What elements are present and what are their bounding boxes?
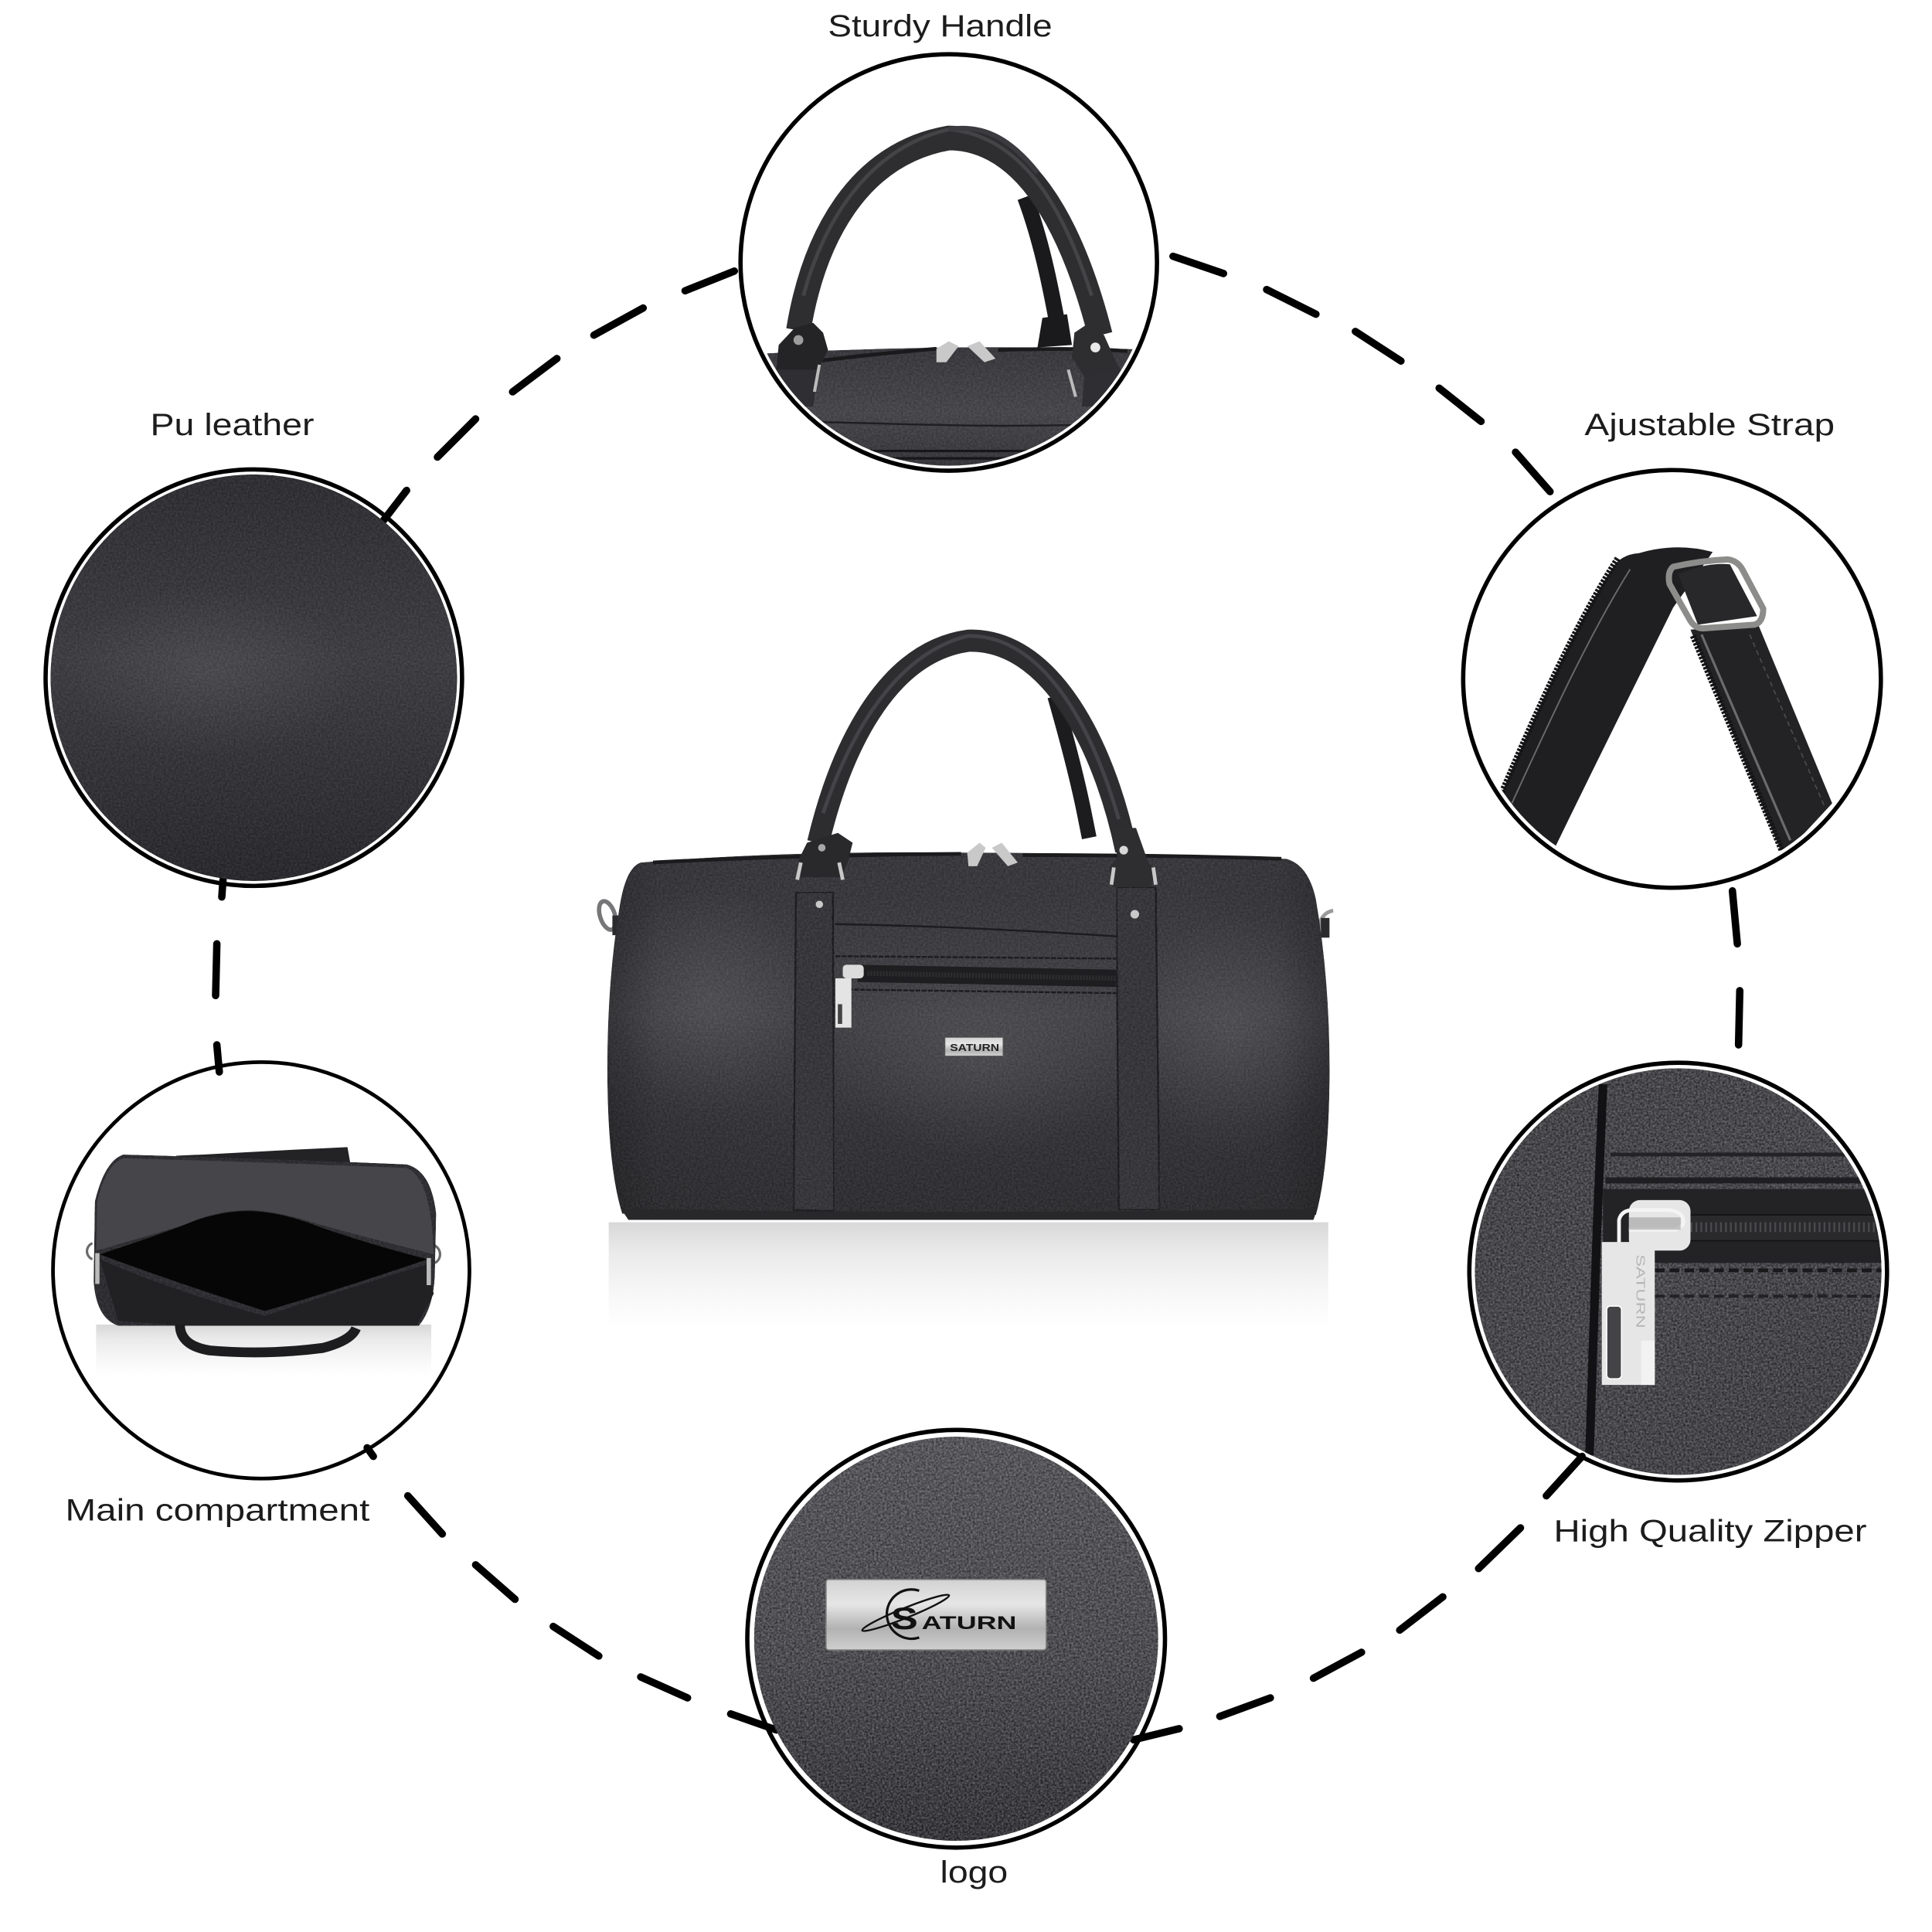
panel: logo xyxy=(747,1430,1165,1848)
leather swatch xyxy=(50,474,457,881)
top zipper seam xyxy=(653,854,1281,862)
label: pu leather: Pu leather xyxy=(151,408,315,442)
pocket zipper pull xyxy=(835,964,864,1028)
circle outline xyxy=(740,54,1157,471)
circle outline xyxy=(46,469,462,886)
bottom handle xyxy=(180,1325,356,1352)
top zipper pulls xyxy=(968,843,1018,866)
panel: sturdy handle xyxy=(740,54,1158,493)
top panel highlight xyxy=(96,1158,434,1254)
bag reflection xyxy=(96,1325,431,1376)
lower panel xyxy=(100,1259,434,1326)
front handle xyxy=(818,636,1126,850)
panel: pu leather xyxy=(46,469,462,886)
zipper image xyxy=(1466,1060,1891,1485)
right strap xyxy=(1109,828,1159,1210)
swatch highlight xyxy=(62,585,357,758)
outer shell xyxy=(94,1155,436,1326)
circle outline xyxy=(1463,470,1881,888)
floor reflection xyxy=(609,1223,1328,1328)
zipper image: SATURN xyxy=(1633,1254,1646,1328)
circle outline xyxy=(747,1430,1165,1848)
circle outline xyxy=(53,1062,469,1478)
circle outline xyxy=(1469,1063,1887,1481)
strap image xyxy=(1502,547,1832,856)
small logo plate: SATURN xyxy=(950,1042,999,1053)
leather swatch xyxy=(754,1437,1158,1841)
open bag image xyxy=(87,1147,440,1376)
dashed connector ring xyxy=(216,257,1740,1740)
back handle xyxy=(1055,696,1089,838)
small logo plate xyxy=(945,1037,1003,1056)
label: sturdy handle: Sturdy Handle xyxy=(828,9,1053,43)
panel: main compartment xyxy=(53,1062,469,1478)
opening xyxy=(100,1211,427,1311)
central duffle bag xyxy=(596,636,1333,1328)
left strap xyxy=(794,833,852,1211)
top handle xyxy=(175,1147,351,1180)
bag body xyxy=(607,852,1329,1215)
label: ajustable strap: Ajustable Strap xyxy=(1584,408,1835,442)
metal badge: S xyxy=(891,1602,918,1636)
metal badge xyxy=(826,1580,1046,1650)
panel: high quality zipper xyxy=(1466,1060,1891,1485)
detail image: handle xyxy=(767,125,1133,466)
panel: adjustable strap xyxy=(1463,470,1881,888)
front pocket seams xyxy=(835,924,1117,993)
side rings xyxy=(596,899,1333,937)
label: high quality zipper: High Quality Zipper xyxy=(1554,1515,1866,1549)
label: main compartment: Main compartment xyxy=(66,1493,369,1527)
label: logo: logo xyxy=(940,1855,1008,1889)
bottom trim xyxy=(621,1209,1317,1219)
metal badge: ATURN xyxy=(922,1613,1016,1634)
side rings xyxy=(87,1243,440,1263)
zipper pulls xyxy=(97,1253,429,1285)
body shading xyxy=(607,852,1331,1215)
